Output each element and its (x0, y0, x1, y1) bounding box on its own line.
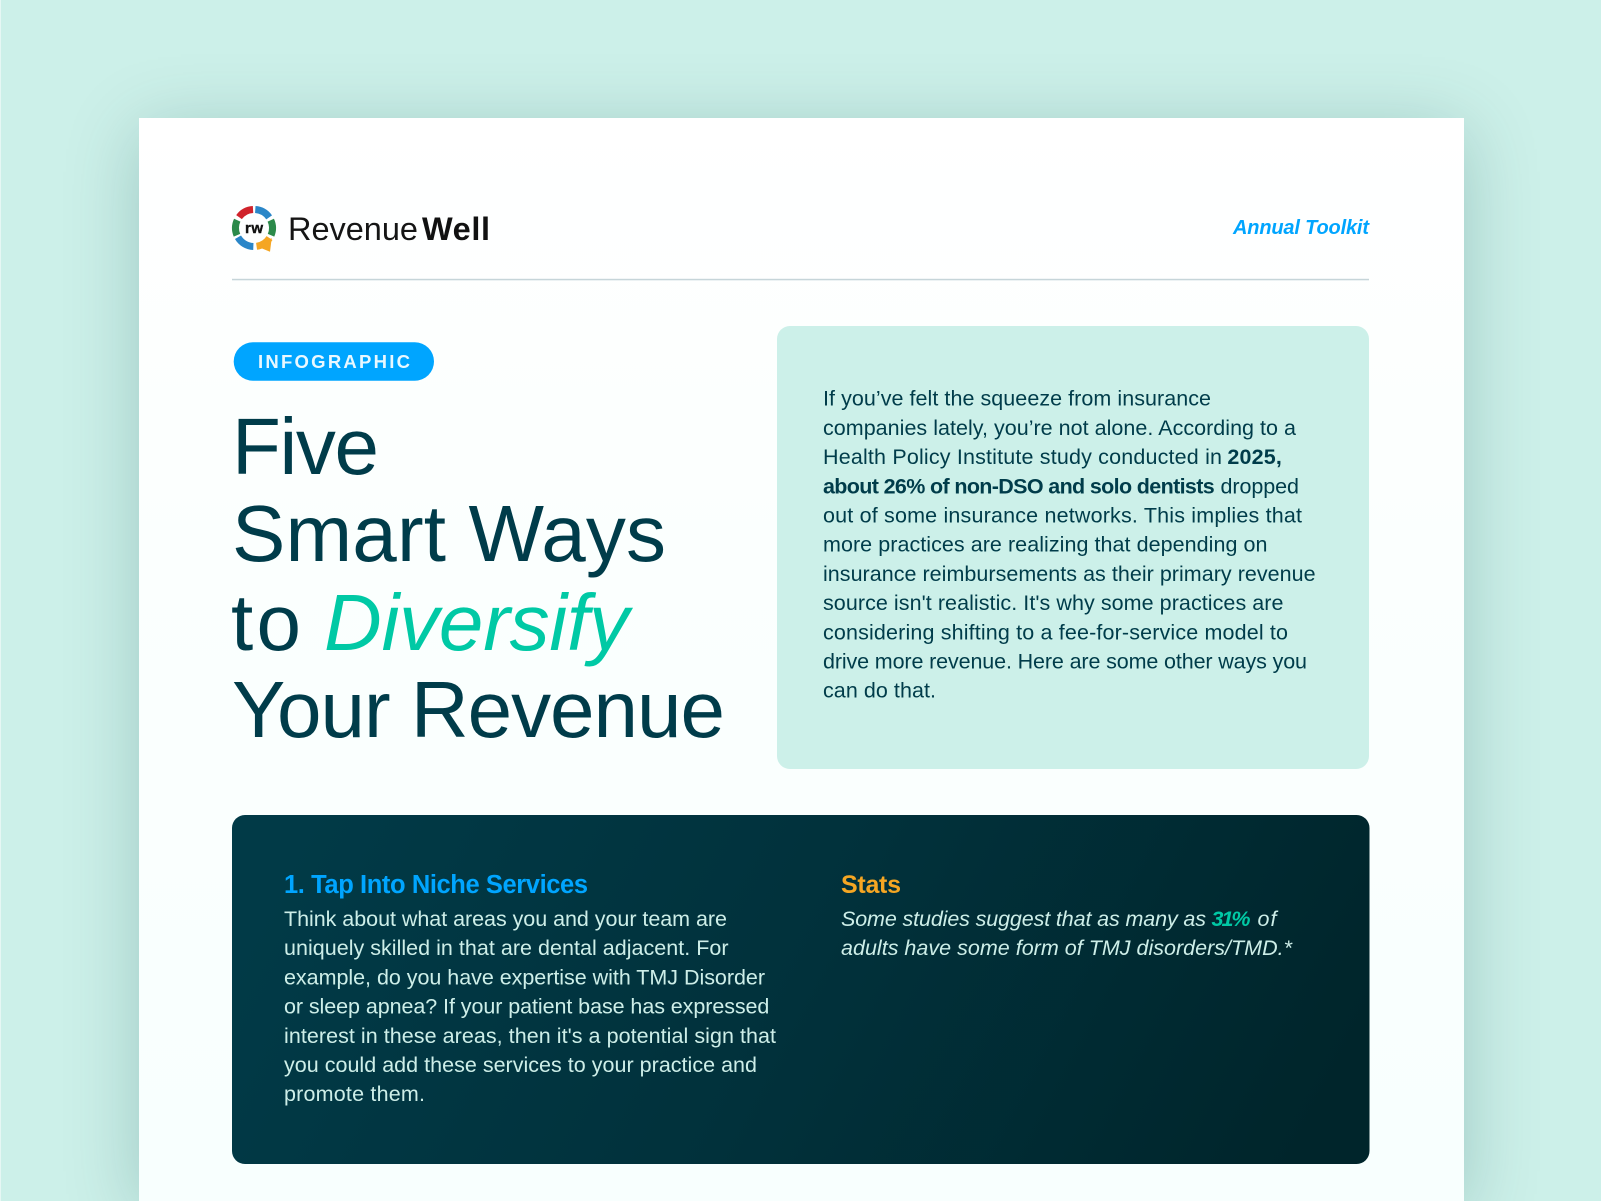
intro paragraph: about 26% of non-DSO and solo dentists (823, 474, 1215, 498)
stats text: Some studies suggest that as many as (841, 907, 1206, 931)
panel: white page sheet (138, 118, 1464, 1201)
intro paragraph (823, 387, 1316, 703)
badge: INFOGRAPHIC (234, 342, 434, 381)
icon: logo ring (235, 210, 273, 252)
intro paragraph: If you’ve felt the squeeze from insurance (823, 387, 1211, 411)
tip 1 body text: interest in these areas, then it's a potential sign that (284, 1024, 776, 1048)
intro paragraph: Health Policy Institute study conducted in (823, 445, 1222, 469)
title: Your Revenue (232, 665, 725, 754)
panel: tip 1 (232, 815, 1370, 1164)
tip 1 body text: example, do you have expertise with TMJ Disorder (284, 965, 765, 989)
intro paragraph: companies lately, you’re not alone. According to a (823, 416, 1296, 440)
stats text: adults have some form of TMJ disorders/TMD.* (841, 936, 1293, 960)
intro paragraph: dropped (1220, 474, 1299, 498)
tip 1 body text: promote them. (284, 1082, 425, 1106)
title: Smart Ways (232, 489, 666, 578)
tip 1 body text (284, 907, 776, 1106)
intro paragraph: considering shifting to a fee-for-service model to (823, 620, 1288, 644)
badge: INFOGRAPHIC: INFOGRAPHIC (258, 351, 410, 372)
title: Five (232, 402, 379, 491)
intro paragraph: can do that. (823, 679, 936, 703)
tip 1 body text: Think about what areas you and your team are (284, 907, 727, 931)
stats text (841, 907, 1293, 960)
title: Diversify (324, 578, 634, 667)
label: Annual Toolkit: Annual Toolkit (1232, 217, 1370, 239)
heading: tip 1: 1. Tap Into Niche Services (284, 871, 588, 899)
icon: logo ring: rw (245, 220, 263, 237)
logo: RevenueWell (235, 210, 490, 252)
intro paragraph: insurance reimbursements as their primary revenue (823, 562, 1316, 586)
intro paragraph: drive more revenue. Here are some other ways you (823, 650, 1307, 674)
intro paragraph: more practices are realizing that depending on (823, 533, 1268, 557)
title: to (231, 578, 301, 667)
logo: RevenueWell: Well (422, 211, 490, 247)
stats text: of (1258, 907, 1279, 931)
tip 1 body text: uniquely skilled in that are dental adjacent. For (284, 936, 728, 960)
intro paragraph: 2025, (1227, 445, 1282, 469)
intro paragraph: source isn't realistic. It's why some practices are (823, 591, 1284, 615)
tip 1 body text: you could add these services to your practice and (284, 1053, 757, 1077)
wordmark: Revenue (288, 211, 418, 247)
heading: stats: Stats (841, 871, 901, 899)
panel: intro text (777, 326, 1369, 769)
stats text: 31% (1212, 907, 1250, 931)
title (231, 402, 725, 754)
tip 1 body text: or sleep apnea? If your patient base has expressed (284, 995, 769, 1019)
intro paragraph: out of some insurance networks. This implies that (823, 504, 1302, 528)
